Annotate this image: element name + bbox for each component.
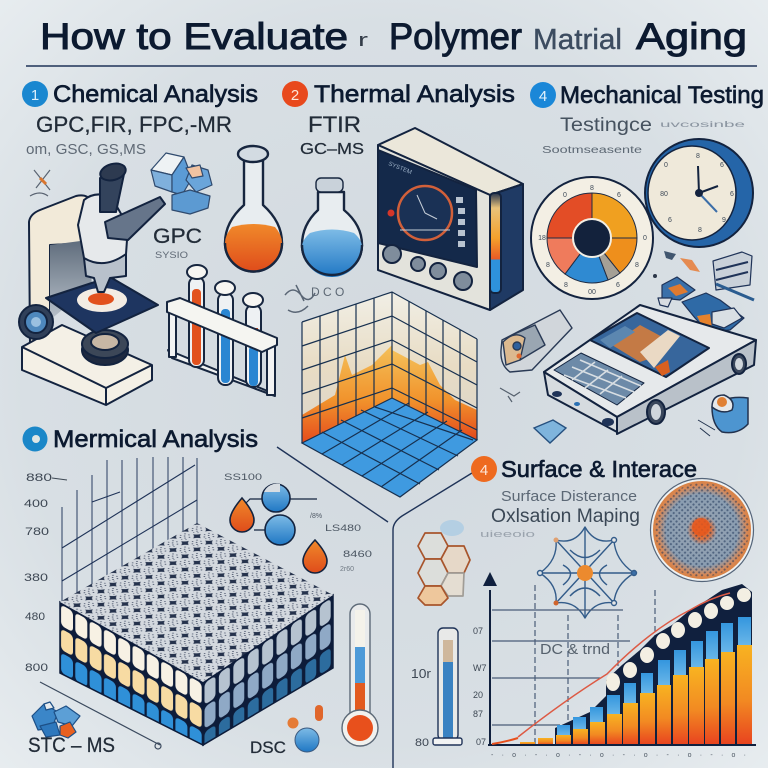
small data labels: SS100	[224, 472, 262, 482]
small sublabel: uieeoio	[480, 529, 535, 539]
connector lines	[277, 447, 472, 768]
blue sphere	[262, 484, 290, 512]
instrument knobs	[383, 245, 472, 290]
icon: clock: 6	[720, 162, 724, 169]
badge orange: 4	[480, 462, 488, 479]
microscope objective	[84, 248, 126, 292]
small data labels: /8%	[310, 513, 322, 520]
icon: dial gauge: 0	[563, 192, 567, 199]
icon: cylinder component	[501, 310, 572, 372]
x ticks: - · o · - · o · - · o · - · o · - · o · - · o ·	[491, 752, 746, 759]
chart: background grid lines	[62, 457, 197, 652]
chart: stacked growth bars	[473, 572, 756, 759]
icon: droplets and spheres	[230, 484, 327, 573]
loose fragments	[653, 251, 700, 278]
gripper part	[682, 293, 744, 332]
tick labels: 07	[473, 626, 483, 636]
label GC-MS: GC–MS	[300, 141, 364, 158]
heading: mermical analysis: Mermical Analysis	[53, 426, 258, 453]
icon: thermal analyzer instrument	[378, 128, 523, 310]
y axis labels: 480	[25, 611, 45, 623]
icon: small capacitor	[698, 395, 748, 436]
heading: surface and interface: Surface & Interace	[501, 456, 697, 482]
label GPC: GPC	[153, 225, 202, 248]
device screen	[590, 313, 709, 377]
label SEC-MS with crystals: STC – MS	[28, 734, 115, 757]
icon: dial gauge: 8	[635, 262, 639, 269]
panel: thermal analysis lower heading	[22, 426, 258, 453]
methods list: GPC,FIR, FPC,-MR	[36, 112, 232, 137]
heading: thermal analysis: Thermal Analysis	[314, 81, 515, 108]
icon: blue flask	[302, 178, 362, 277]
instrument screen	[378, 150, 477, 267]
tube 1	[187, 265, 207, 367]
small data labels	[224, 472, 372, 573]
icon: dial gauge: 8	[590, 185, 594, 192]
icon: dial gauge: 8	[564, 282, 568, 289]
icon: dial gauge: 8	[546, 262, 550, 269]
icon: clock	[645, 139, 753, 247]
panel: surface and interface heading	[471, 456, 697, 539]
icon: clock: 6	[730, 191, 734, 198]
instrument temperature slot	[490, 193, 501, 293]
device wheels	[647, 354, 746, 424]
icon: sketch marks	[500, 388, 520, 402]
icon: dial gauge: 6	[616, 282, 620, 289]
tube 2	[215, 281, 235, 385]
tube 3	[243, 293, 263, 387]
chart label: DC & trnd	[540, 641, 610, 658]
block right face	[203, 595, 333, 745]
chart: 3D surface grid	[302, 292, 477, 497]
block left face	[60, 602, 203, 745]
icon: clock: 9	[722, 217, 726, 224]
left wall	[302, 292, 392, 445]
microscope body	[78, 194, 128, 263]
tick labels: 07	[476, 737, 486, 747]
icon: handheld tester device	[544, 305, 756, 434]
cream caps	[606, 588, 751, 691]
y axis labels: 880	[26, 472, 52, 484]
dark backing	[555, 584, 752, 745]
title: Matrial	[533, 24, 622, 56]
icon: dial gauge	[531, 177, 653, 299]
panel: thermal analysis heading	[282, 81, 515, 158]
microscope base	[22, 325, 152, 405]
small data labels: 2r60	[340, 566, 354, 573]
title: Polymer	[389, 16, 522, 57]
badge lower left	[22, 426, 48, 452]
tick labels: 87	[473, 709, 483, 719]
badge 2	[282, 81, 308, 107]
icon: test tube gauge	[433, 628, 462, 745]
icon: dial gauge: 18	[538, 235, 546, 242]
device keypad	[554, 353, 644, 405]
icon: small formula sketch	[285, 285, 344, 312]
badge 2: 2	[291, 87, 299, 104]
sub label: Surface Disterance	[501, 488, 637, 505]
clamp part	[658, 277, 695, 307]
icon: test tube rack	[167, 265, 277, 396]
heading: mechanical testing: Mechanical Testing	[560, 82, 764, 109]
label near gauge: 80	[415, 737, 429, 749]
small data labels: LS480	[325, 523, 361, 533]
microscope stage	[46, 277, 158, 333]
axes	[483, 572, 756, 745]
tick labels: W7	[473, 663, 486, 673]
block top face	[60, 523, 333, 682]
icon: small sketch marks	[30, 170, 50, 196]
label near gauge	[411, 666, 432, 749]
tick labels: 20	[473, 690, 483, 700]
icon: hexagon chain	[418, 520, 470, 605]
icon: small tag	[534, 420, 566, 443]
badge 1	[22, 81, 48, 107]
label SEC-MS with crystals	[28, 702, 115, 757]
crystal icon	[32, 702, 80, 738]
title: Aging	[636, 16, 747, 57]
badge 1: 1	[31, 87, 39, 104]
diagram: polymer cell block	[60, 523, 333, 745]
icon: scattered mechanical parts	[653, 251, 754, 332]
sub label oxidation: Oxlsation Maping	[491, 506, 640, 527]
small sublabel: Sootmseasente	[542, 145, 643, 156]
orange drop	[230, 498, 254, 532]
badge 4: 4	[539, 88, 547, 105]
label GPC: SYSIO	[155, 250, 188, 260]
icon: orange flask	[225, 146, 282, 272]
icon: oxidation disc map	[650, 478, 754, 582]
label DSC with spheres	[250, 705, 323, 757]
icon: clock: 80	[660, 191, 668, 198]
microscope arm	[29, 195, 92, 345]
gauge colour ring	[547, 193, 637, 283]
tray part	[713, 252, 754, 300]
blue bars	[557, 617, 751, 735]
badge orange	[471, 456, 497, 482]
icon: dial gauge: 00	[588, 289, 596, 296]
blue sphere	[265, 515, 295, 545]
microscope focus knob	[19, 305, 53, 339]
icon: small formula sketch: D C O	[311, 285, 344, 299]
y axis labels: 380	[24, 572, 48, 584]
icon: clock: 6	[668, 217, 672, 224]
probe line	[40, 682, 161, 749]
microscope side tube	[105, 197, 165, 240]
small label: uvcosinbe	[660, 120, 746, 129]
small data labels: 8460	[343, 549, 372, 559]
instrument screen: SYSTEM	[387, 161, 412, 176]
title: How to Evaluate	[40, 16, 348, 57]
panel: mechanical testing heading	[530, 82, 764, 156]
icon: microscope	[19, 161, 165, 405]
trend curve	[518, 593, 730, 737]
orange bars	[520, 645, 752, 745]
icon: clock: 8	[698, 227, 702, 234]
orange drop	[303, 540, 327, 573]
microscope lens stack	[82, 330, 128, 365]
y axis labels: 800	[25, 662, 48, 674]
y axis labels: 400	[24, 498, 48, 510]
icon: blue crystal cluster	[151, 153, 212, 214]
icon: clock: 8	[696, 153, 700, 160]
label near gauge: 10r	[411, 666, 432, 681]
y axis labels	[24, 472, 67, 674]
label GPC	[153, 225, 202, 260]
chart grid	[492, 585, 655, 745]
microscope eyepiece	[98, 161, 128, 212]
icon: molecular web	[538, 527, 636, 618]
title	[40, 16, 747, 57]
tick labels	[473, 626, 486, 747]
y axis labels: 780	[25, 526, 49, 538]
badge 4	[530, 82, 556, 108]
methods sublist: om, GSC, GS,MS	[26, 141, 146, 158]
panel: chemical analysis heading	[22, 81, 258, 158]
title: r	[358, 30, 368, 50]
icon: thermometer	[342, 604, 378, 746]
icon: dial gauge: 0	[643, 235, 647, 242]
label FTIR: FTIR	[308, 112, 361, 137]
label DSC with spheres: DSC	[250, 738, 286, 757]
right wall	[392, 292, 477, 440]
label testing: Testingce	[560, 115, 652, 136]
floor	[302, 398, 477, 497]
heading: chemical analysis: Chemical Analysis	[53, 81, 258, 108]
icon: dial gauge: 6	[617, 192, 621, 199]
icon: clock: 0	[664, 162, 668, 169]
